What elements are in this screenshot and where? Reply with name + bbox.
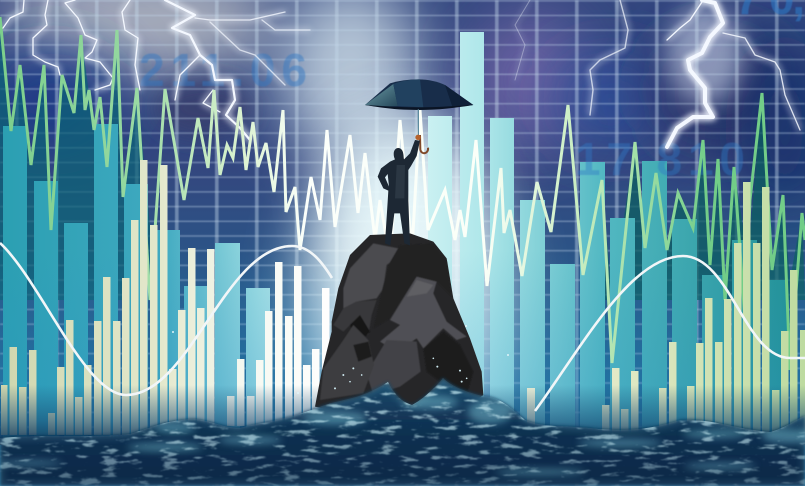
hand — [415, 135, 421, 140]
white sine curve right — [535, 256, 805, 411]
umbrella — [365, 79, 473, 153]
rock facets — [320, 243, 473, 400]
foam texture — [0, 370, 805, 486]
area under zigzag line — [0, 18, 805, 300]
thin cream bars — [1, 160, 805, 435]
faint numbers: 211.06 — [139, 44, 307, 96]
foam blotches — [0, 395, 805, 475]
splash droplets — [172, 325, 509, 394]
fade of charts into water — [0, 385, 805, 445]
water — [0, 325, 805, 486]
zigzag line chart — [0, 17, 805, 370]
faint numbers — [139, 0, 805, 185]
wave crest light — [0, 378, 805, 486]
blue wash over lower bars — [0, 250, 805, 430]
white sine curve left — [0, 243, 332, 395]
lightning bolts — [0, 0, 800, 147]
jacket highlight — [395, 165, 405, 198]
rock — [315, 233, 483, 418]
faint numbers: 17 810 — [575, 133, 745, 185]
central glow — [305, 115, 505, 460]
businessman — [378, 135, 421, 245]
rock spray droplets — [334, 357, 467, 389]
